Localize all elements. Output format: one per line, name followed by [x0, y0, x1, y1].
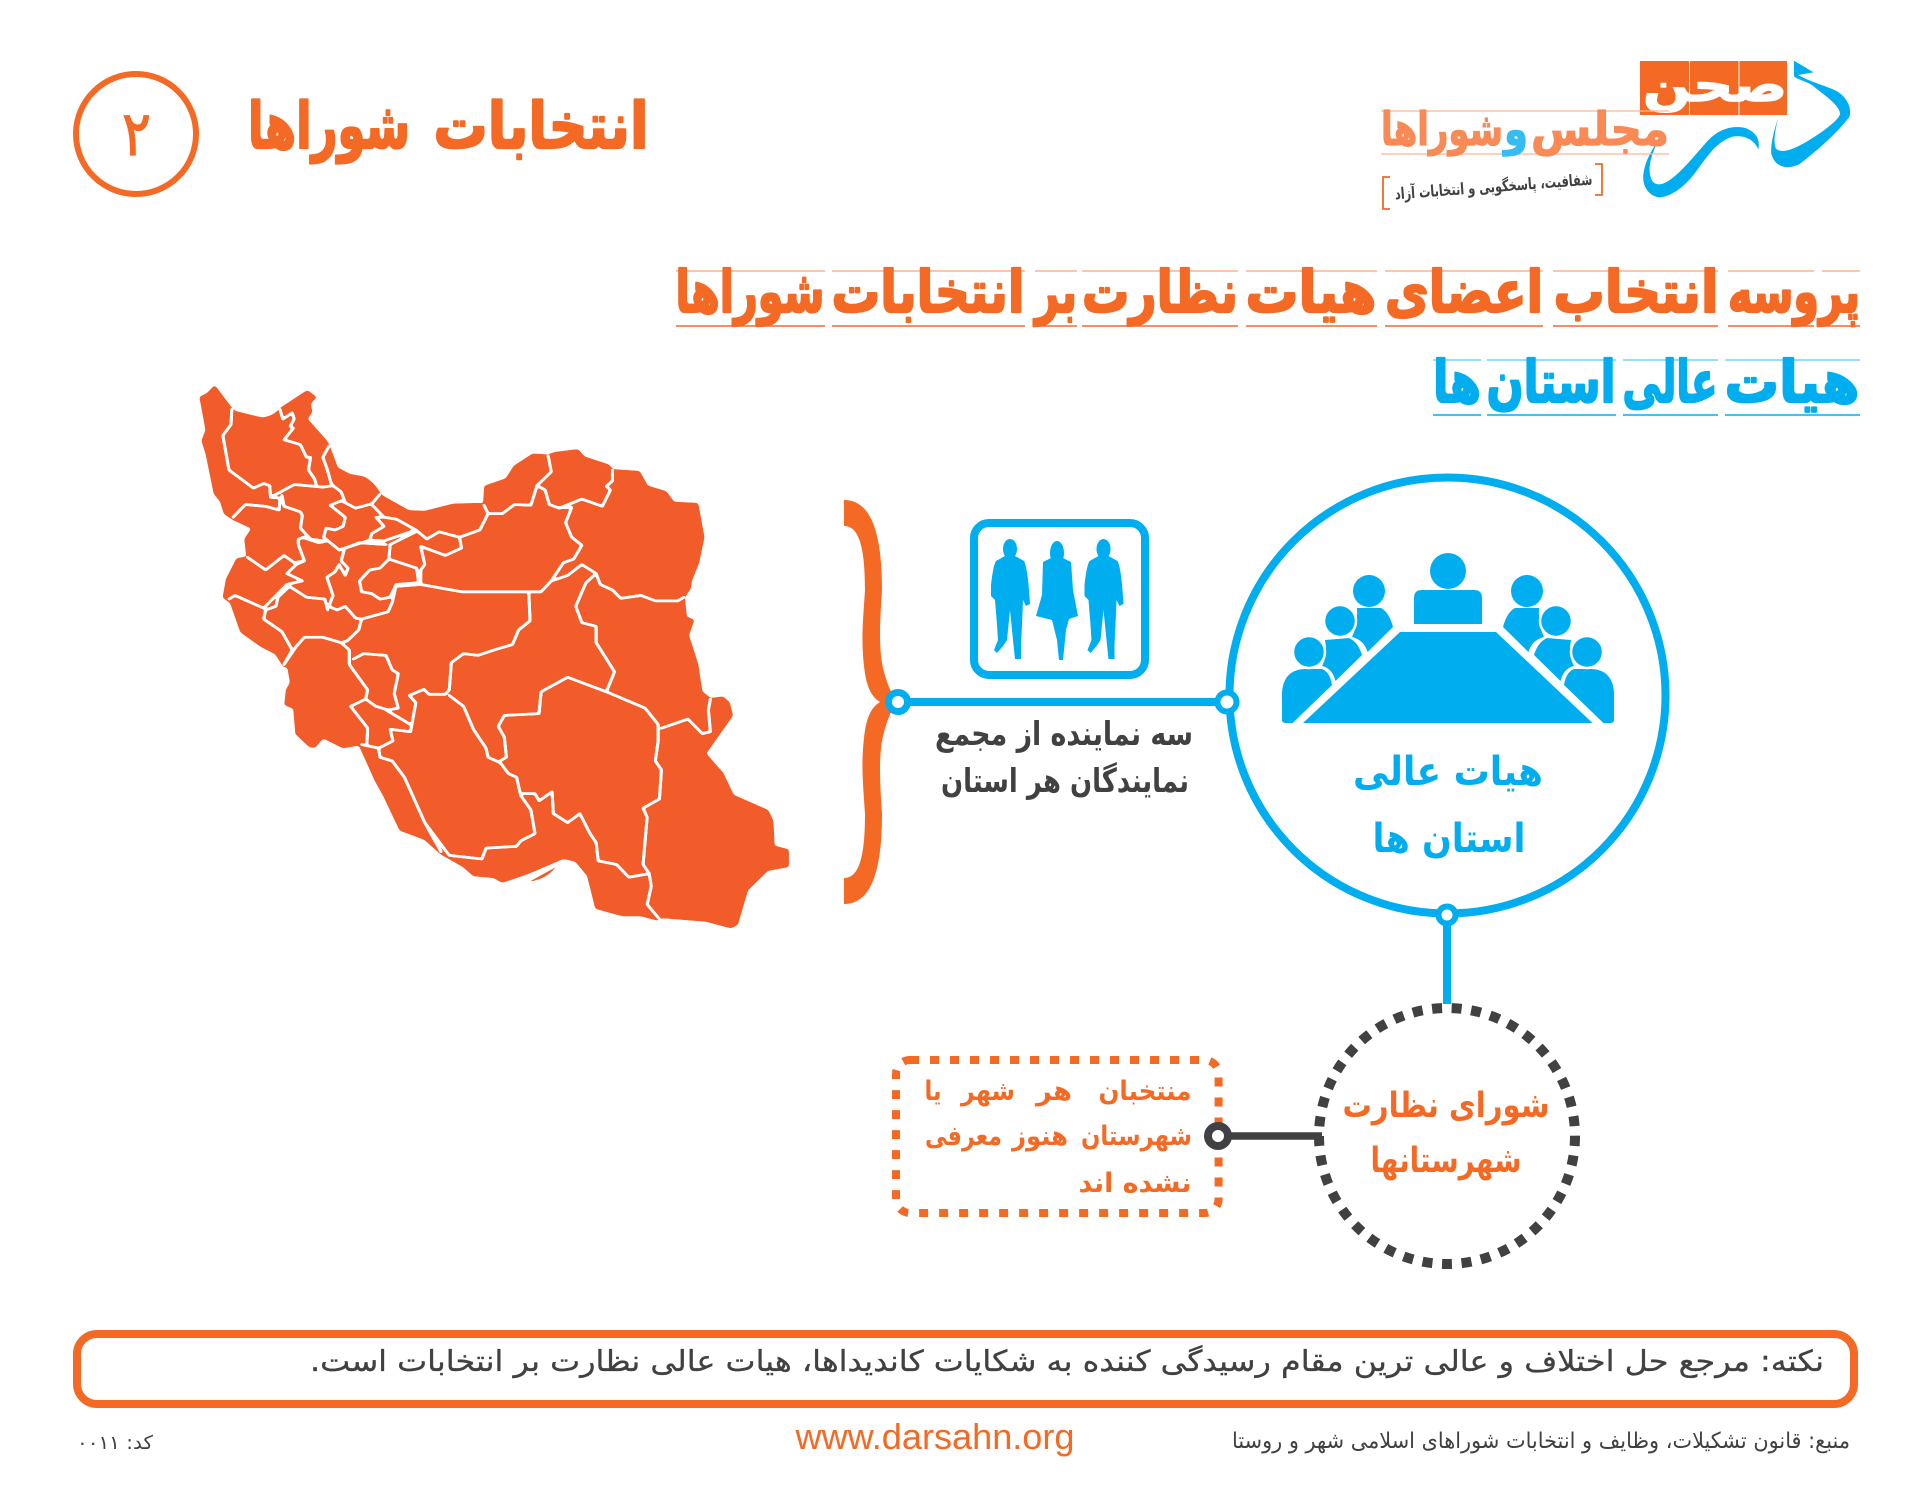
connector: brace to high board circle	[888, 692, 1236, 712]
callout: note	[77, 1334, 1854, 1404]
map of Iran provinces	[200, 386, 788, 927]
label: provincial high board: هیات عالی	[1353, 749, 1543, 795]
subtitle: provincial high board: ها	[1433, 348, 1481, 416]
subtitle: provincial high board	[1433, 348, 1860, 416]
title: process of selecting supervisory board members: اعضای	[1385, 258, 1543, 326]
brace	[844, 500, 898, 904]
panel: notes on city elected members: شهر	[959, 1076, 1015, 1107]
icon: three representatives	[974, 523, 1145, 675]
title: process of selecting supervisory board members: انتخابات	[832, 258, 1024, 326]
panel: notes on city elected members: معرفی	[925, 1121, 1002, 1152]
logo: subtitle words: شوراها	[1381, 102, 1503, 156]
title: process of selecting supervisory board members: بر	[1033, 258, 1077, 327]
panel: provincial high board circle	[1230, 478, 1666, 914]
panel: notes on city elected members: منتخبان	[1098, 1076, 1192, 1107]
logo	[1381, 58, 1850, 209]
panel: notes on city elected members: نشده اند	[1078, 1168, 1192, 1199]
label: provincial high board	[1353, 749, 1543, 862]
panel: notes on city elected members: یا	[924, 1076, 942, 1107]
panel: notes on city elected members: شهرستان	[1081, 1121, 1192, 1152]
title: process of selecting supervisory board members: هیات	[1246, 258, 1376, 326]
footer: code: کد: ۰۰۱۱	[77, 1432, 154, 1454]
caption: three representatives	[935, 714, 1193, 801]
silhouette man left	[991, 539, 1030, 659]
heading: council elections: انتخابات	[434, 90, 648, 164]
callout: note: نکته: مرجع حل اختلاف و عالی ترین مقام رسیدگی کننده به شکایات کاندیداها، هیات عالی نظارت بر انتخابات است.	[310, 1344, 1824, 1378]
panel: county supervisory council: شورای نظارت	[1342, 1086, 1550, 1126]
subtitle: provincial high board: هیات	[1724, 348, 1860, 416]
logo: orange box	[1640, 61, 1787, 115]
logo: subtitle words: مجلس	[1531, 102, 1669, 156]
caption: three representatives: نمایندگان هر استان	[941, 761, 1189, 801]
panel: notes on city elected members: هر	[1034, 1076, 1072, 1107]
logo: subtitle words: و	[1502, 102, 1528, 156]
badge: number 2	[76, 74, 196, 194]
connector: council to notes	[1208, 1126, 1322, 1146]
footer: source: منبع: قانون تشکیلات، وظایف و انتخابات شوراهای اسلامی شهر و روستا	[1232, 1429, 1850, 1454]
title: process of selecting supervisory board members	[676, 258, 1860, 327]
title: process of selecting supervisory board members: پروسه	[1728, 258, 1860, 327]
caption: three representatives: سه نماینده از مجمع	[935, 714, 1193, 754]
label: provincial high board: استان ها	[1372, 816, 1526, 862]
title: process of selecting supervisory board members: شوراها	[676, 258, 824, 327]
footer: website: www.darsahn.org	[794, 1416, 1074, 1457]
logo: subtitle words	[1381, 102, 1669, 156]
logo: tagline with brackets	[1383, 164, 1602, 209]
silhouette man right	[1084, 539, 1124, 659]
title: process of selecting supervisory board members: انتخاب	[1554, 258, 1718, 326]
silhouette woman	[1036, 541, 1078, 660]
logo: blue swoosh bottom	[1643, 127, 1759, 197]
panel: county supervisory council: شهرستانها	[1370, 1141, 1522, 1181]
subtitle: provincial high board: عالی	[1622, 348, 1718, 416]
heading: council elections: شوراها	[248, 90, 410, 164]
title: process of selecting supervisory board members: نظارت	[1082, 258, 1238, 326]
connector: high board to county council	[1438, 906, 1456, 1004]
panel: notes on city elected members	[896, 1060, 1219, 1213]
heading: council elections	[248, 90, 648, 164]
panel: county supervisory council	[1319, 1008, 1575, 1264]
badge: number 2: ۲	[122, 97, 151, 170]
logo: blue swoosh top	[1771, 61, 1850, 167]
panel: notes on city elected members: هنوز	[1010, 1121, 1068, 1152]
logo: white wordmark: صحن	[1643, 58, 1787, 112]
subtitle: provincial high board: استان	[1486, 348, 1616, 416]
logo: tagline with brackets: شفافیت، پاسخگویی و انتخابات آزاد	[1394, 169, 1593, 204]
icon: meeting table	[1282, 553, 1614, 723]
